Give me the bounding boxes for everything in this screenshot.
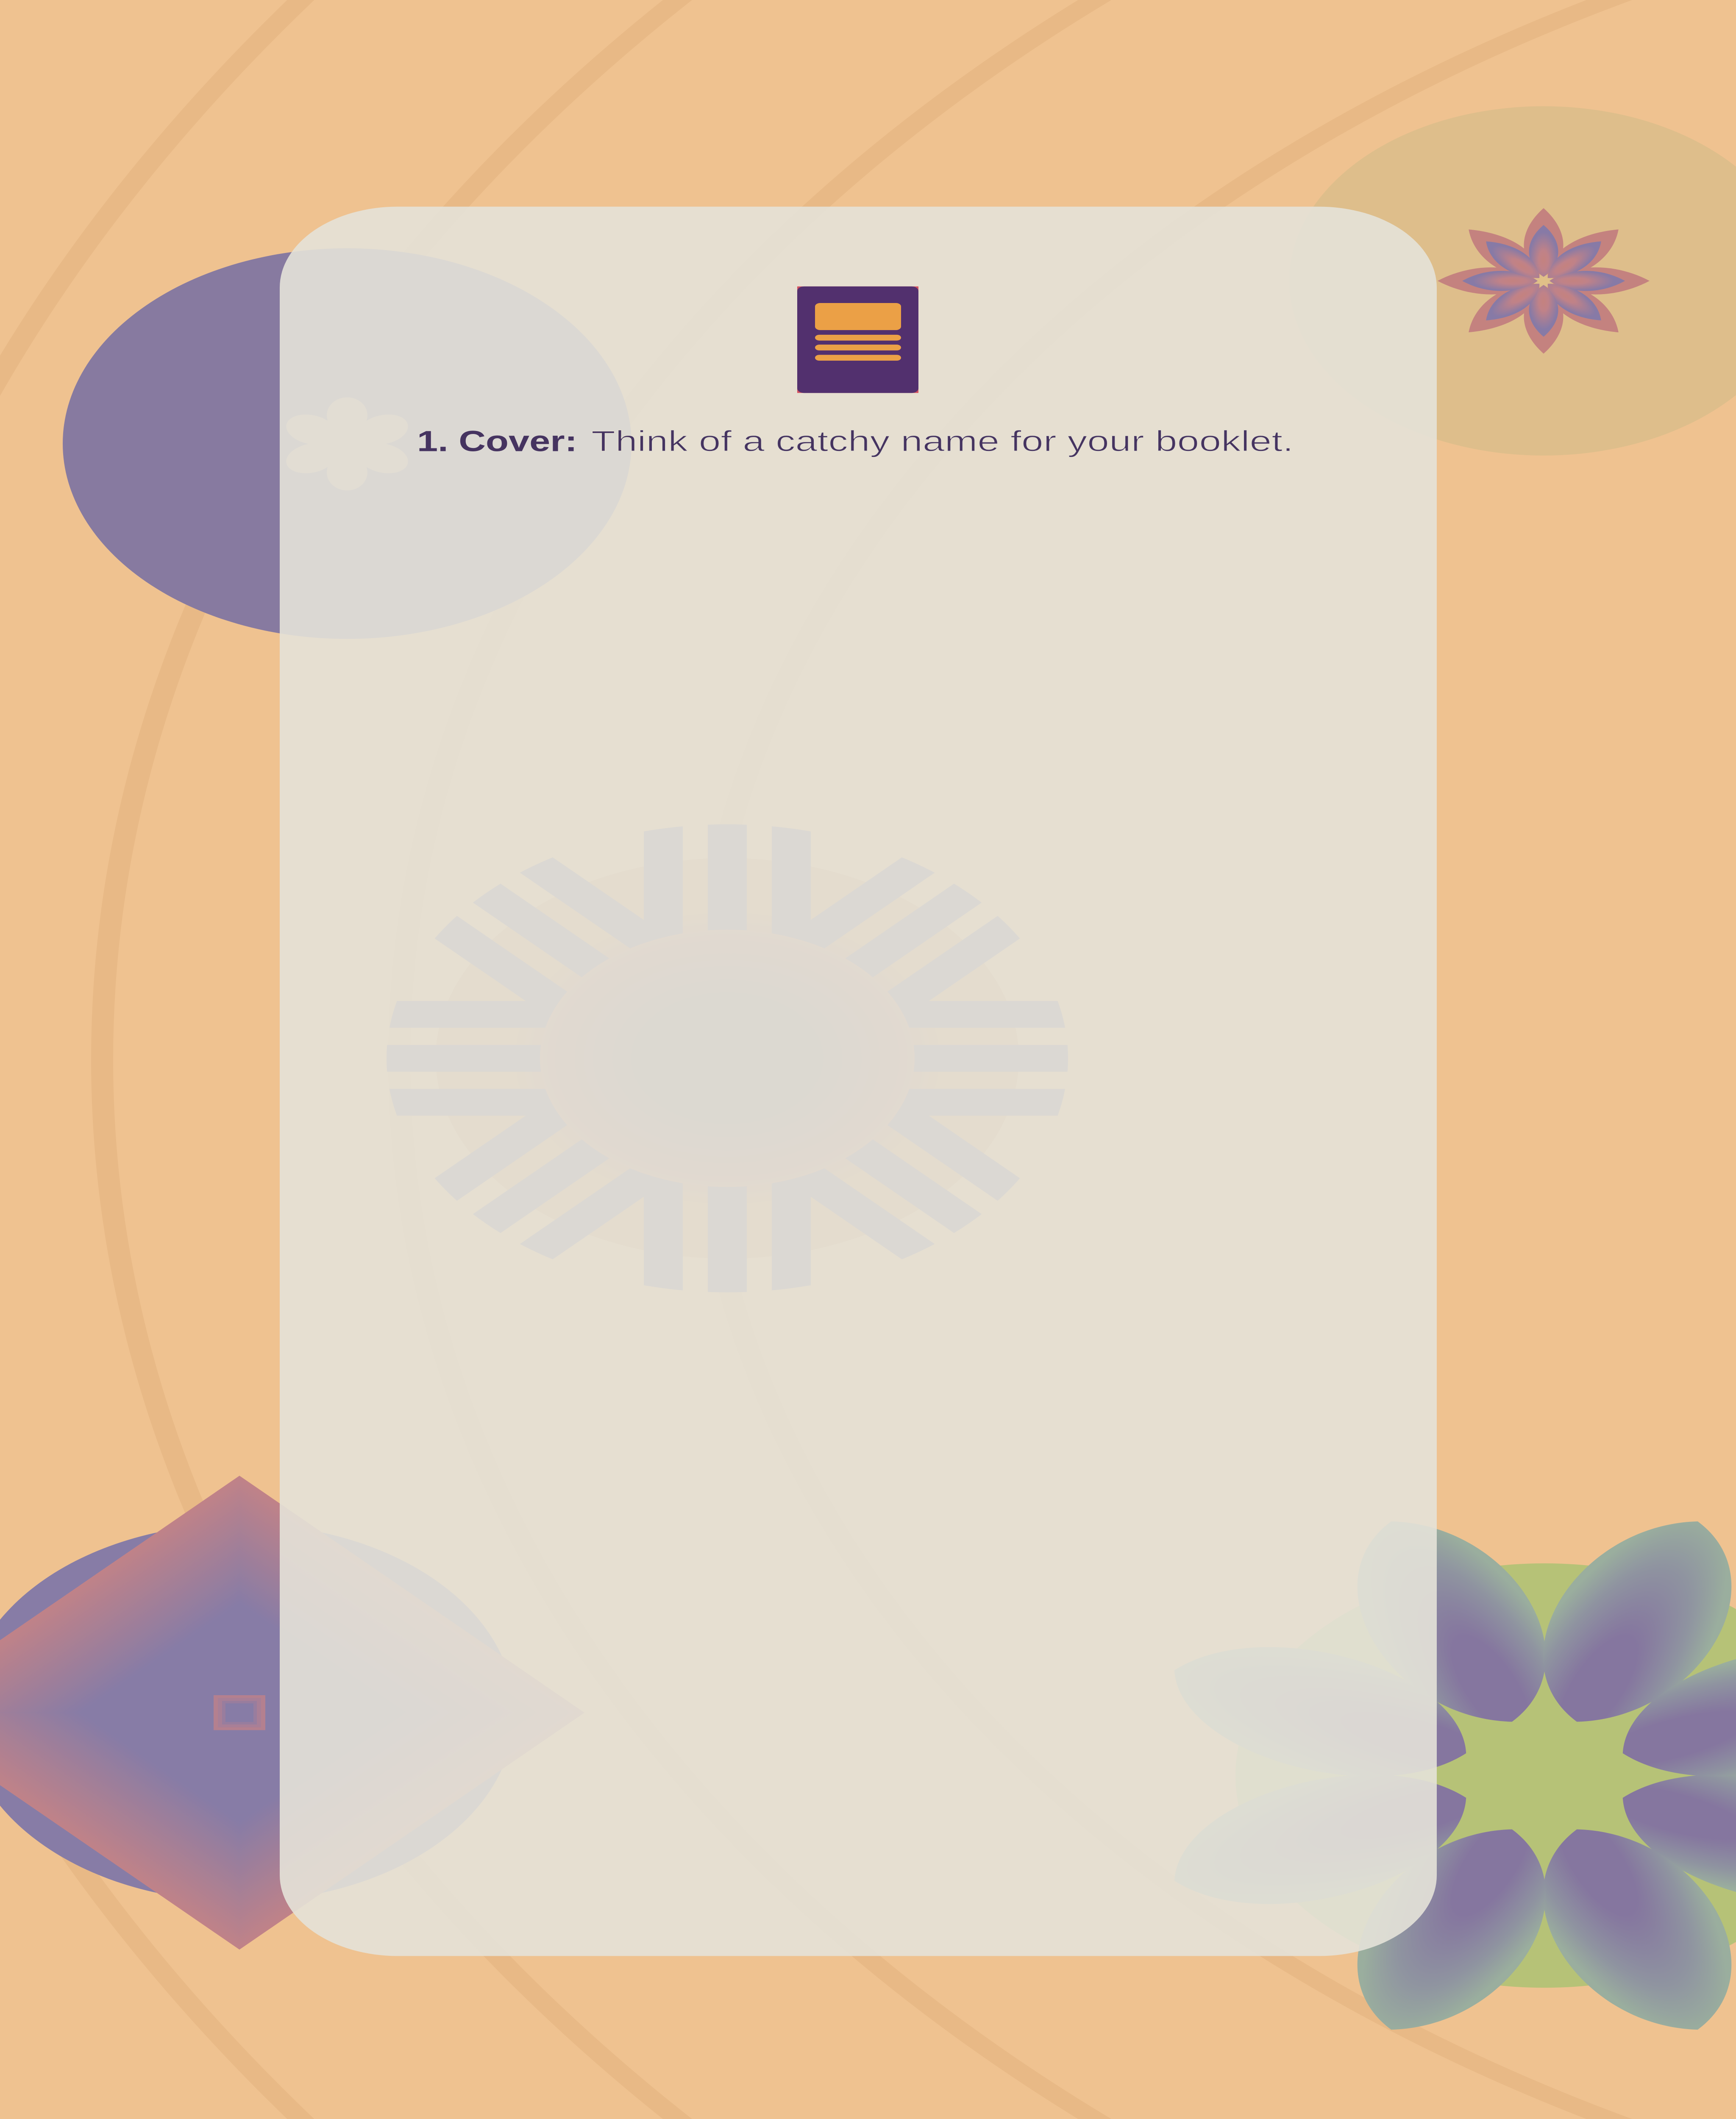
decor: top-left purple circle with flower [63, 248, 632, 639]
decor: central sun motif [384, 823, 1071, 1294]
sun rays [384, 823, 1071, 1294]
diamond with gradient [0, 1476, 584, 1949]
decor: bottom-left circle and diamond [0, 1476, 584, 1949]
panel: translucent card [280, 207, 1437, 1956]
icon: eight-petal flower [1438, 208, 1650, 353]
decor: bottom-right green circle with eight-petal flower [1143, 1499, 1736, 2052]
decor: top-right tan circle with flower [1289, 106, 1736, 456]
icon: large petals [1143, 1499, 1736, 2052]
text: cover instruction: 1. Cover: [417, 425, 577, 458]
icon: small square frame [216, 1696, 263, 1729]
icon: small six-petal flower [278, 398, 416, 490]
text: cover instruction: Think of a catchy name for your booklet. [591, 425, 1294, 458]
icon: booklet [797, 286, 918, 393]
